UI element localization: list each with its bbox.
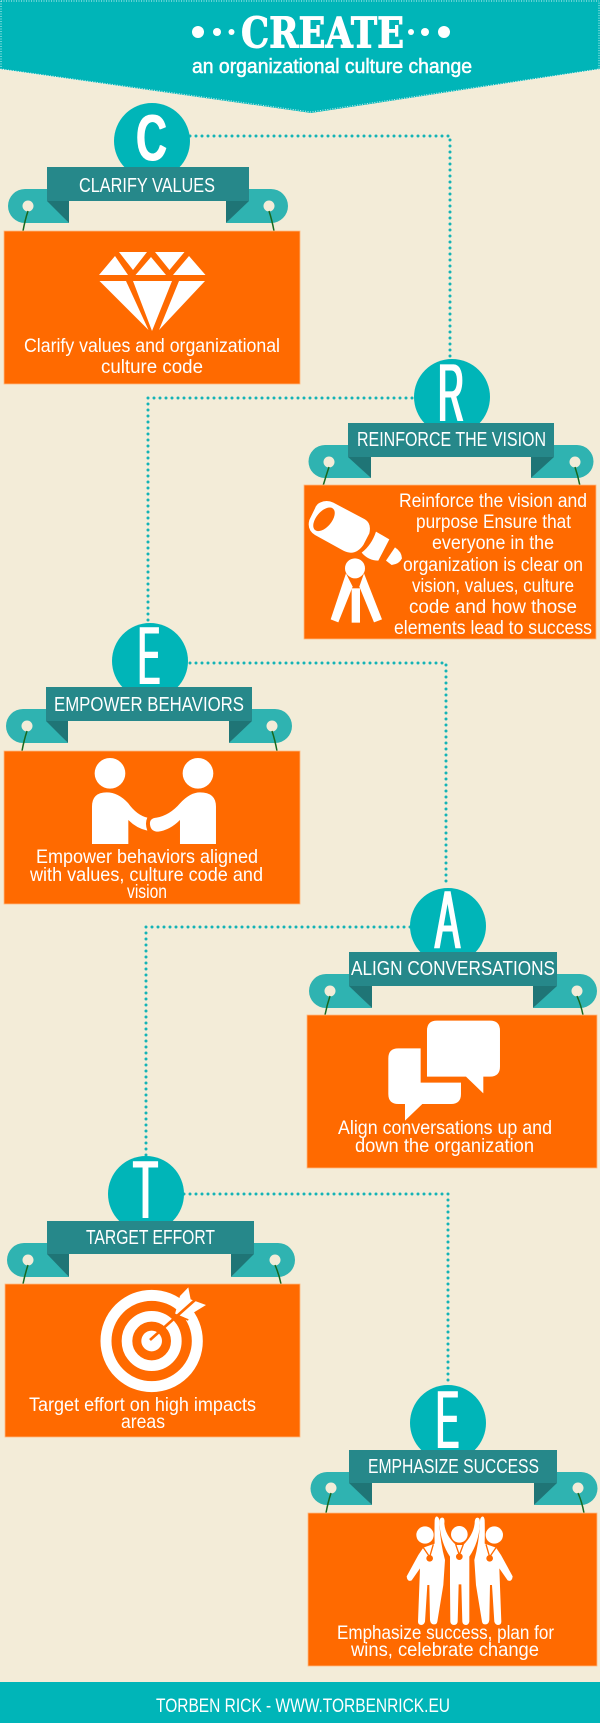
icon: speech bubbles bbox=[388, 1021, 500, 1121]
letter circle T: T bbox=[133, 1143, 158, 1236]
ribbon: empower behaviors: EMPOWER BEHAVIORS bbox=[54, 694, 244, 716]
panel: C clarify values bbox=[4, 100, 300, 384]
card text: vision bbox=[127, 882, 167, 903]
header banner bbox=[0, 0, 600, 113]
orange card bbox=[5, 1284, 300, 1437]
card text: Clarify values and organizational bbox=[24, 336, 280, 357]
panel: R reinforce the vision bbox=[304, 346, 596, 639]
ribbon: empower behaviors bbox=[6, 687, 292, 751]
card text: vision, values, culture bbox=[412, 576, 574, 597]
card text: code and how those bbox=[409, 597, 577, 618]
card text: wins, celebrate change bbox=[350, 1640, 539, 1661]
card text: Align conversations up and bbox=[338, 1118, 552, 1139]
card text: Target effort on high impacts bbox=[29, 1395, 256, 1416]
letter circle E: E bbox=[436, 1373, 459, 1466]
ribbon: align conversations bbox=[309, 952, 597, 1015]
title: CREATE bbox=[241, 8, 404, 58]
letter circle E bbox=[112, 609, 188, 702]
panel: E emphasize success bbox=[308, 1373, 598, 1666]
icon: handshake bbox=[92, 758, 216, 844]
panel: E empower behaviors bbox=[4, 609, 300, 904]
letter circle E: E bbox=[138, 609, 160, 702]
card text bbox=[24, 336, 280, 378]
ribbon: target effort: TARGET EFFORT bbox=[86, 1227, 215, 1249]
ribbon: clarify values: CLARIFY VALUES bbox=[79, 175, 215, 197]
card text bbox=[29, 1395, 256, 1433]
ribbon: align conversations: ALIGN CONVERSATIONS bbox=[351, 958, 555, 980]
footer bar bbox=[0, 1682, 600, 1723]
card text bbox=[394, 491, 592, 639]
ribbon: target effort bbox=[7, 1221, 295, 1284]
panel: A align conversations bbox=[307, 873, 597, 1168]
icon: telescope bbox=[309, 501, 402, 623]
card text: Reinforce the vision and bbox=[399, 491, 587, 512]
card text: culture code bbox=[101, 357, 203, 378]
icon: celebrating team bbox=[407, 1516, 513, 1625]
ribbon: clarify values bbox=[8, 167, 288, 231]
orange card bbox=[307, 1015, 597, 1168]
dotted connectors bbox=[146, 136, 450, 1385]
letter circle A bbox=[410, 873, 486, 966]
card text bbox=[337, 1623, 555, 1661]
ribbon: reinforce the vision: REINFORCE THE VISION bbox=[357, 429, 546, 451]
card text: purpose Ensure that bbox=[416, 512, 572, 533]
card text: organization is clear on bbox=[403, 555, 583, 576]
icon: target with arrow bbox=[106, 1287, 206, 1387]
letter circle R bbox=[414, 346, 490, 439]
icon: diamond bbox=[99, 252, 206, 331]
letter circle C: C bbox=[136, 100, 167, 174]
ribbon: emphasize success bbox=[310, 1450, 598, 1513]
card text: everyone in the bbox=[432, 533, 554, 554]
card text: down the organization bbox=[355, 1136, 534, 1157]
panel: T target effort bbox=[5, 1143, 300, 1437]
orange card bbox=[4, 751, 300, 904]
orange card bbox=[4, 231, 300, 384]
card text bbox=[29, 847, 263, 903]
footer credit: TORBEN RICK - WWW.TORBENRICK.EU bbox=[156, 1696, 450, 1717]
card text: Emphasize success, plan for bbox=[337, 1623, 555, 1644]
subtitle: an organizational culture change bbox=[192, 56, 472, 78]
card text: Empower behaviors aligned bbox=[36, 847, 258, 868]
ribbon: emphasize success: EMPHASIZE SUCCESS bbox=[368, 1456, 539, 1478]
letter circle A: A bbox=[435, 873, 460, 966]
letter circle R: R bbox=[438, 346, 464, 439]
letter circle T bbox=[108, 1143, 184, 1236]
letter circle E bbox=[410, 1373, 486, 1466]
letter circle C bbox=[114, 100, 190, 179]
orange card bbox=[308, 1513, 597, 1666]
card text: with values, culture code and bbox=[29, 865, 263, 886]
orange card bbox=[304, 485, 596, 639]
ribbon: reinforce the vision bbox=[308, 423, 594, 486]
card text: areas bbox=[121, 1412, 165, 1433]
card text bbox=[338, 1118, 552, 1157]
